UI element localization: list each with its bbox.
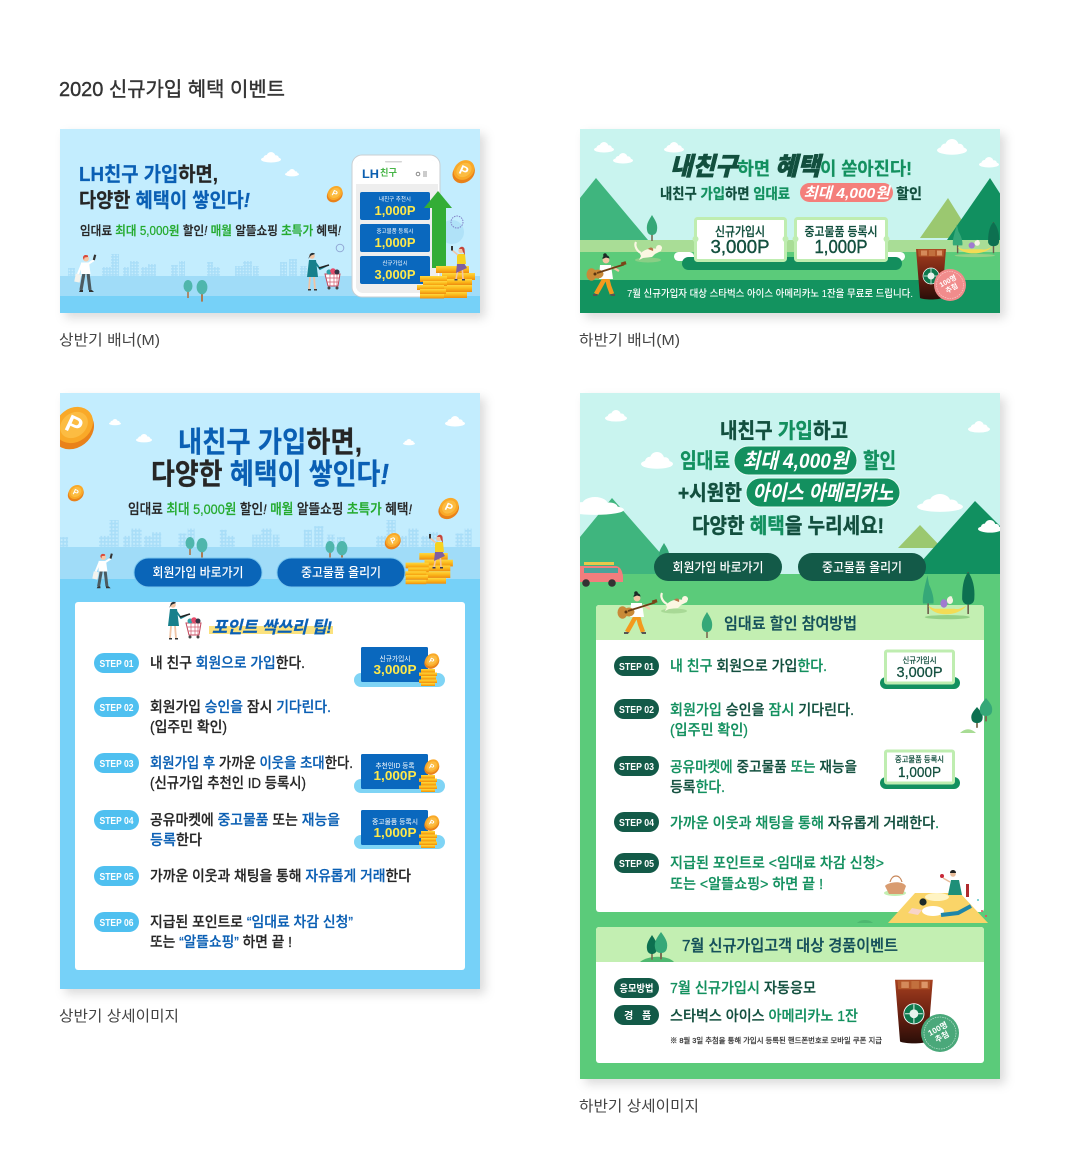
row: prize (614, 1005, 858, 1025)
point card: 3,000P: P (428, 657, 435, 666)
step 06: 또는 “알뜰쇼핑” 하면 끝 ! (150, 934, 292, 951)
icon: woman on coins (451, 246, 467, 280)
step 04 (94, 810, 340, 849)
step 05 (614, 853, 884, 893)
ticket: sign-up 3000P: 3,000P (896, 664, 942, 681)
badge: 100 winners: 100명 (938, 273, 958, 289)
coin over ground: P (389, 535, 398, 546)
caption: first half detail: 상반기 상세이미지 (59, 1008, 179, 1025)
panel: first half banner (M) (60, 129, 480, 313)
ticket: used goods 1000P (792, 218, 890, 260)
step 03 (614, 756, 857, 796)
icon: man with phone (74, 254, 96, 292)
step 05 (94, 866, 411, 886)
banner headline: 다양한 혜택이 쌓인다! (79, 189, 250, 212)
ticket: used goods 1000P: 중고물품 등록시 (804, 225, 878, 239)
headline: 임대료 (680, 450, 730, 473)
right mountains (920, 198, 962, 238)
small coin left (68, 485, 84, 502)
small coin (326, 186, 343, 202)
icon: camper van (580, 562, 623, 587)
step 01: STEP 01 (100, 659, 134, 670)
step 03 (94, 753, 353, 792)
step 02: 회원가입 승인을 잠시 기다린다. (670, 702, 854, 719)
banner footer note: 7월 신규가입자 대상 스타벅스 아이스 아메리카노 1잔을 무료로 드립니다. (627, 287, 913, 300)
card heading (596, 927, 984, 962)
caption: second half banner: 하반기 배너(M) (579, 332, 680, 349)
row: entry method: 7월 신규가입시 자동응모 (670, 980, 816, 997)
ticket: used goods 1000P: 1,000P (814, 237, 868, 257)
footnote: ※ 8월 3일 추첨을 통해 가입시 등록된 핸드폰번호로 모바일 쿠폰 지급 (670, 1035, 882, 1045)
point card: recommend 1,000P (354, 754, 445, 793)
coin right (438, 498, 459, 520)
card heading (596, 605, 984, 640)
badge: 100 winners: 추첨 (933, 1029, 951, 1044)
point card: used goods 1,000P: 중고물품 등록시 (372, 818, 418, 826)
point card: 3,000P (354, 647, 445, 687)
ticket: used goods 1000P: 중고물품 등록시 (895, 755, 944, 764)
button: post used goods (798, 553, 926, 581)
headline: 아이스 아메리카노 (752, 482, 894, 505)
point card: recommend 1,000P: 1,000P (374, 768, 417, 783)
step 03: 등록한다. (670, 779, 725, 796)
banner headline (79, 163, 250, 212)
step 01 (94, 653, 305, 673)
headline: 할인 (863, 450, 896, 473)
coin right: P (443, 501, 454, 515)
headline: 내친구 가입하면, (178, 426, 362, 459)
big coin: P (61, 410, 87, 441)
panel: second half banner (M) (580, 129, 1030, 313)
banner sub-copy: 임대료 최대 5,000원 할인! 매월 알뜰쇼핑 초특가 혜택! (80, 223, 341, 238)
road pill (674, 252, 905, 270)
headline: 내친구 가입하고 (720, 420, 848, 443)
left mountain (580, 178, 648, 240)
point card: 3,000P: 3,000P (374, 662, 417, 677)
small coin left: P (71, 487, 81, 498)
step 04: 가까운 이웃과 채팅을 통해 자유롭게 거래한다. (670, 815, 939, 832)
step 03: STEP 03 (100, 759, 134, 770)
badge: 100 winners: 100명 (926, 1019, 949, 1038)
icon: hammock (923, 572, 974, 619)
banner headline: LH친구 가입하면, (79, 163, 218, 186)
phone mockup: LH (362, 169, 379, 181)
headline: 최대 4,000원 (742, 450, 851, 473)
coin over ground (384, 533, 401, 550)
step 04: 등록한다 (150, 832, 202, 849)
row: prize: 스타벅스 아이스 아메리카노 1잔 (670, 1008, 858, 1025)
step 05: STEP 05 (619, 859, 654, 870)
step 06 (94, 912, 353, 951)
icon: dog (661, 593, 688, 614)
icon: guitarist (618, 591, 658, 634)
button: sign up: 회원가입 바로가기 (672, 560, 764, 575)
button: post used goods: 중고물품 올리기 (822, 560, 902, 575)
icon: coin stacks (403, 553, 453, 584)
section heading: 포인트 싹쓰리 팁! (212, 618, 332, 637)
button: sign up (654, 553, 782, 581)
point card: used goods 1,000P (354, 810, 445, 849)
caption: second half detail: 하반기 상세이미지 (579, 1098, 699, 1115)
sub-copy: 임대료 최대 5,000원 할인! 매월 알뜰쇼핑 초특가 혜택! (128, 501, 412, 517)
point card: sign-up: 신규가입시 (382, 259, 408, 267)
point card: recommend: 내친구 추천시 (379, 195, 411, 203)
point card: used goods (360, 224, 430, 252)
headline: +시원한 (678, 482, 742, 505)
step 02 (614, 699, 854, 739)
button: sign up (134, 558, 262, 587)
point card: sign-up (360, 256, 430, 284)
step 02: (입주민 확인) (670, 722, 748, 739)
card: July gift event (596, 927, 984, 1063)
point card: used goods: 1,000P (374, 235, 416, 250)
button: post used goods (277, 558, 405, 587)
arrow: green up (424, 191, 452, 268)
step 04 (614, 812, 939, 832)
step 05: 또는 <알뜰쇼핑> 하면 끝 ! (670, 876, 823, 893)
step 03: STEP 03 (619, 762, 654, 773)
step 02: (입주민 확인) (150, 719, 227, 736)
step 04: 공유마켓에 중고물품 또는 재능을 (150, 812, 340, 829)
step 01 (614, 656, 827, 676)
step 05: 지급된 포인트로 <임대료 차감 신청> (670, 855, 884, 872)
badge: 100 winners (921, 1014, 959, 1052)
step 01: 내 친구 회원으로 가입한다. (150, 655, 305, 672)
step 02: 회원가입 승인을 잠시 기다린다. (150, 699, 331, 716)
banner sub-line: 최대 4,000원 (804, 185, 892, 202)
icon: side trees (960, 698, 992, 733)
big coin: P (457, 162, 471, 179)
illustration: picnic (857, 870, 988, 923)
button: post used goods: 중고물품 올리기 (301, 565, 381, 580)
badge: 100 winners: 추첨 (944, 281, 959, 295)
ticket: sign-up 3000P: 신규가입시 (715, 225, 765, 239)
icon: woman with cart (168, 602, 201, 640)
ticket: used goods 1000P: 1,000P (898, 764, 941, 781)
ground bands (580, 240, 1000, 253)
point card: sign-up: 3,000P (374, 267, 416, 282)
card heading: 7월 신규가입고객 대상 경품이벤트 (682, 937, 898, 955)
banner sub-line: 내친구 가입하면 임대료 (660, 186, 790, 203)
step 02 (94, 697, 331, 736)
icon: woman on coins (429, 534, 445, 568)
ticket: sign-up 3000P (692, 218, 788, 260)
right mountains (898, 525, 938, 548)
point card: recommend: 1,000P (374, 203, 416, 218)
step 01: 내 친구 회원으로 가입한다. (670, 658, 827, 675)
big coin (452, 160, 475, 184)
row: entry method (614, 978, 816, 998)
icon: dog (635, 242, 662, 262)
row: prize: 경 (624, 1010, 633, 1022)
banner sub-line: 할인 (896, 186, 922, 203)
step 05: 가까운 이웃과 채팅을 통해 자유롭게 거래한다 (150, 868, 411, 885)
step 01: STEP 01 (619, 662, 654, 673)
row: prize: 품 (642, 1010, 651, 1022)
headline: 다양한 혜택을 누리세요! (692, 515, 884, 538)
ticket: sign-up 3000P: 신규가입시 (902, 656, 936, 665)
icon: iced americano (895, 980, 933, 1043)
icon: hammock (953, 222, 999, 257)
icon: iced americano (916, 249, 946, 300)
step 04: STEP 04 (619, 818, 654, 829)
step 05: STEP 05 (100, 872, 134, 883)
step 06: STEP 06 (100, 918, 134, 929)
banner sub-line (660, 183, 922, 203)
headline: 다양한 혜택이 쌓인다! (151, 458, 389, 491)
phone mockup: 친구 (380, 167, 397, 179)
page title: 2020 신규가입 혜택 이벤트 (59, 78, 285, 101)
point card: used goods: 중고물품 등록시 (377, 228, 413, 235)
panel: second half detail image (566, 393, 1030, 1079)
ticket: sign-up 3000P (880, 651, 960, 689)
point card: recommend 1,000P: P (428, 763, 435, 772)
caption: first half banner: 상반기 배너(M) (59, 332, 160, 349)
point card: used goods 1,000P: 1,000P (374, 825, 417, 840)
phone mockup (352, 155, 440, 297)
step 03: (신규가입 추천인 ID 등록시) (150, 775, 306, 792)
badge: 100 winners (934, 269, 966, 301)
small coin: P (330, 188, 340, 199)
step 04: STEP 04 (100, 816, 134, 827)
row: entry method: 응모방법 (620, 982, 654, 995)
button: sign up: 회원가입 바로가기 (152, 565, 244, 580)
step 03: 회원가입 후 가까운 이웃을 초대한다. (150, 755, 353, 772)
big coin (60, 406, 94, 450)
headline (678, 420, 900, 538)
icon: man with phone (92, 553, 113, 588)
step 06: 지급된 포인트로 “임대료 차감 신청” (150, 914, 353, 931)
card heading: 임대료 할인 참여방법 (724, 615, 857, 633)
left mountain (580, 498, 660, 574)
ticket: used goods 1000P (880, 751, 960, 789)
step 02: STEP 02 (100, 703, 134, 714)
point card: recommend 1,000P: 추천인ID 등록 (376, 761, 415, 770)
card: discount participation (596, 572, 992, 923)
icon: woman with shopping cart (307, 253, 340, 290)
ticket: sign-up 3000P: 3,000P (710, 237, 770, 257)
point card: 3,000P: 신규가입시 (380, 654, 410, 663)
step 03: 공유마켓에 중고물품 또는 재능을 (670, 759, 857, 776)
point card: used goods 1,000P: P (428, 819, 435, 828)
banner headline: 내친구하면 혜택이 쏟아진다! (670, 153, 912, 181)
panel: first half detail image (60, 393, 488, 998)
headline (151, 426, 389, 491)
point card: recommend (360, 192, 430, 220)
step 02: STEP 02 (619, 705, 654, 716)
white steps card (75, 602, 465, 970)
icon: guitarist (586, 253, 627, 296)
icon: coin stacks (417, 266, 475, 298)
